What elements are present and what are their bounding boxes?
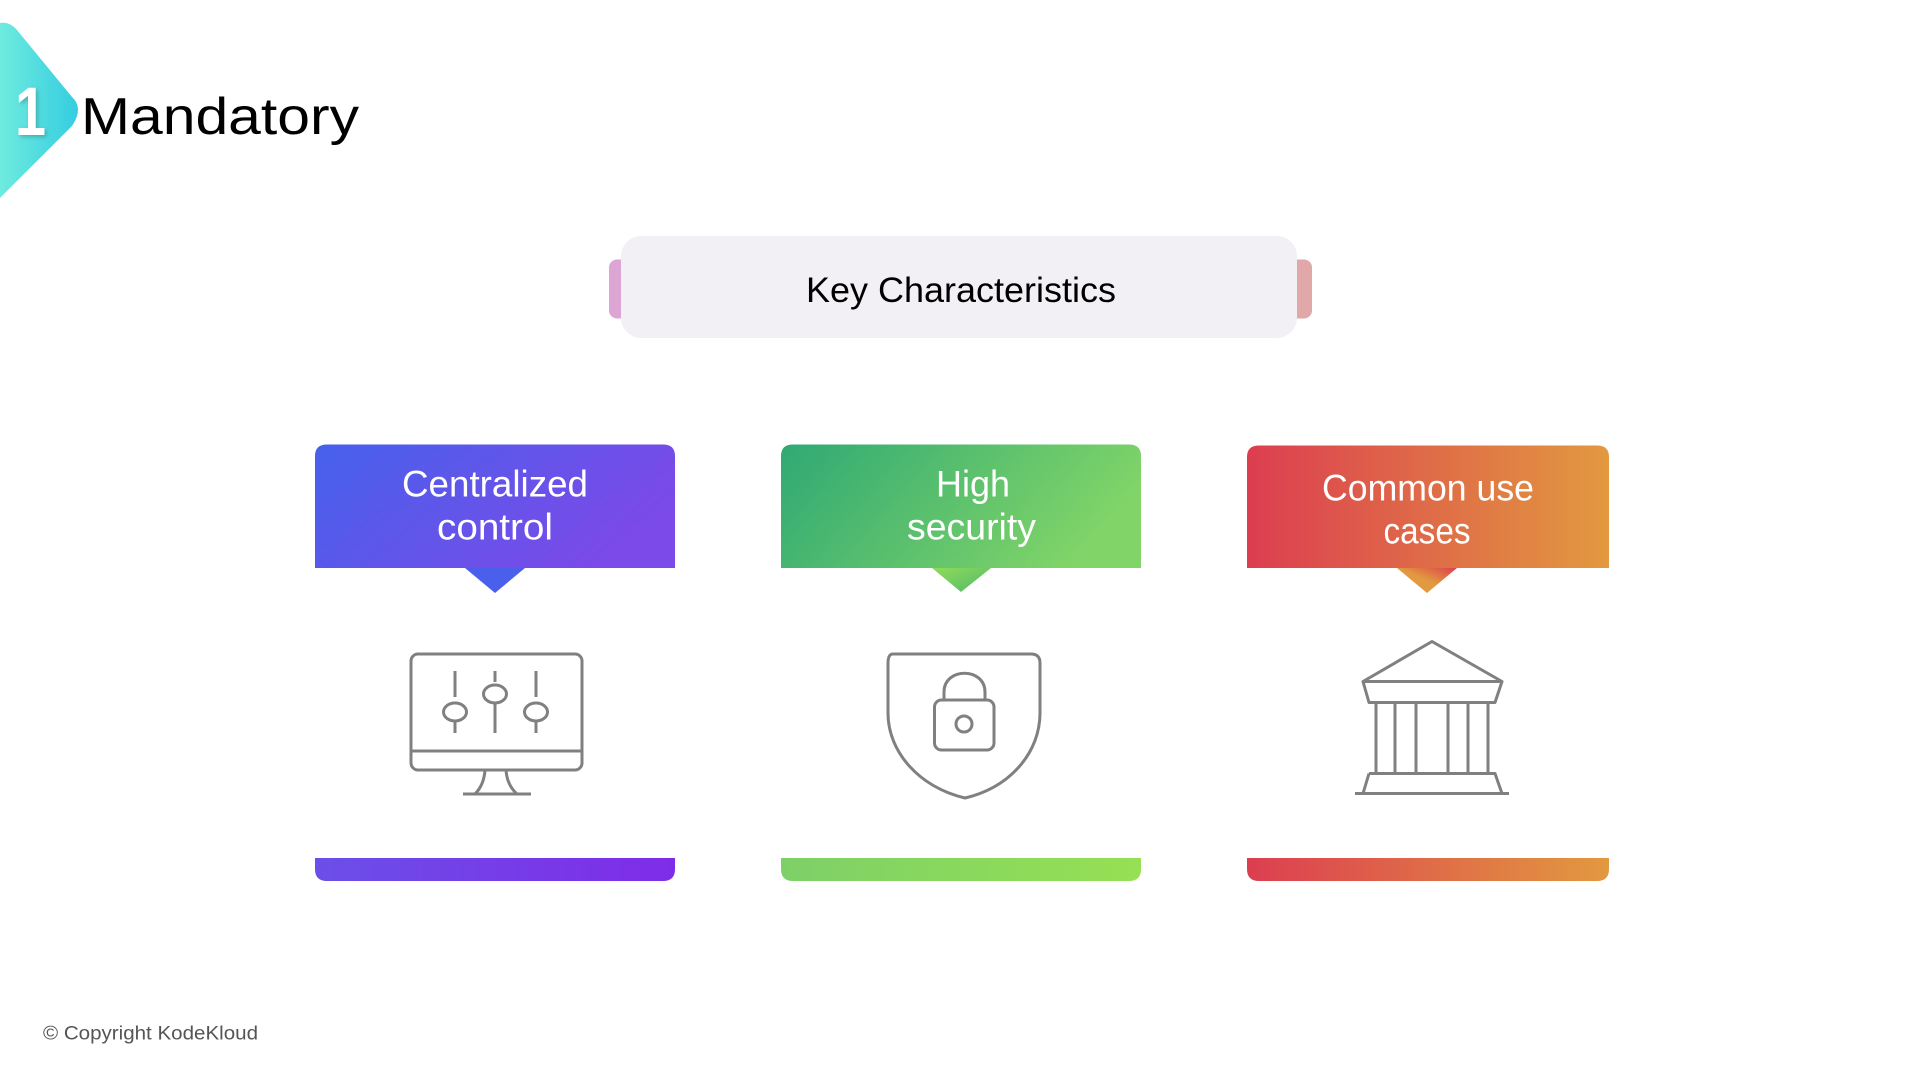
header text: Common use (1322, 468, 1534, 508)
panel: key characteristics heading (609, 236, 1312, 338)
panel: high security: security (907, 506, 1036, 548)
header (315, 444, 675, 568)
arrow (932, 568, 991, 592)
bottom bar (781, 858, 1141, 881)
header (781, 444, 1141, 568)
teal diamond (0, 23, 78, 198)
panel: high security (781, 444, 1141, 881)
title: Mandatory (81, 88, 359, 146)
copyright footer: © Copyright KodeKloud (43, 1024, 258, 1044)
bottom bar (315, 858, 675, 881)
header (1247, 446, 1609, 568)
panel: centralized control: control (437, 506, 553, 548)
icon: shield with padlock (888, 654, 1040, 798)
left tab (609, 260, 639, 318)
icon: monitor with sliders (411, 654, 582, 794)
header text: High (936, 464, 1010, 504)
arrow (465, 568, 525, 593)
panel: common use cases: cases (1384, 510, 1470, 552)
number 1: 1 (15, 73, 46, 150)
heading box (621, 236, 1297, 338)
bottom bar (1247, 858, 1609, 881)
section number badge (0, 23, 78, 198)
right tab (1282, 260, 1312, 318)
heading text: Key Characteristics (806, 271, 1116, 310)
panel: common use cases (1247, 446, 1609, 881)
icon: bank building (1355, 642, 1509, 794)
header text: Centralized (402, 464, 588, 504)
arrow (1397, 568, 1457, 593)
panel: centralized control (315, 444, 675, 881)
